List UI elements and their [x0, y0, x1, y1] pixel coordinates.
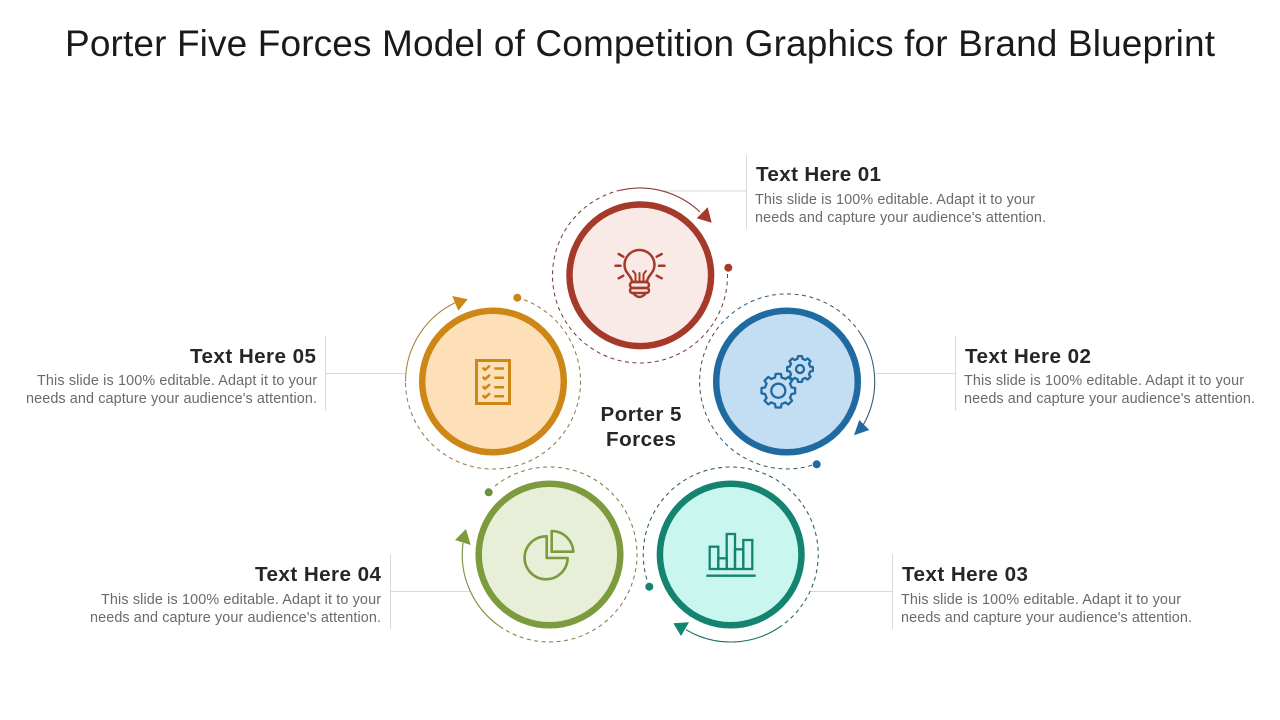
dashed orbit 2: [700, 294, 860, 469]
text block 05: [26, 345, 317, 407]
arrowhead 2: [854, 420, 869, 435]
text block 05: Text Here 05: [190, 345, 316, 368]
dot 1: [724, 264, 732, 272]
force 5: checklist node: [406, 294, 580, 469]
text block 03: [901, 563, 1192, 626]
solid arc 1: [620, 188, 700, 212]
circle 4: [479, 484, 620, 625]
text block 04: This slide is 100% editable. Adapt it to your: [101, 592, 381, 608]
text block 01: Text Here 01: [756, 163, 881, 186]
dot 2: [813, 460, 821, 468]
force 1: lightbulb node: [553, 188, 732, 363]
center label: Porter 5 Forces: [600, 403, 682, 451]
dashed orbit 1: [553, 190, 728, 363]
text block 02: needs and capture your audience's attention.: [964, 391, 1255, 407]
solid arc 2: [860, 333, 875, 427]
icon: checklist: [476, 360, 510, 404]
icon: lightbulb: [616, 250, 664, 297]
dashed orbit 4: [495, 467, 637, 642]
solid arc 4: [462, 543, 500, 627]
solid arc 3: [686, 625, 782, 642]
center label: Porter 5 Forces: Porter 5: [600, 403, 682, 426]
text block 01: [755, 163, 1046, 226]
text block 04: Text Here 04: [255, 563, 382, 586]
connector lines: [325, 155, 956, 629]
circle 5: [422, 311, 564, 452]
text block 02: This slide is 100% editable. Adapt it to your: [964, 373, 1244, 389]
icon: bar chart: [706, 534, 756, 576]
force 3: bar chart node: [643, 467, 818, 642]
arrowhead 1: [697, 207, 712, 223]
force 4: pie chart node: [455, 467, 637, 642]
text block 01: This slide is 100% editable. Adapt it to your: [755, 192, 1035, 208]
icon: gears: [762, 356, 813, 407]
arrowhead 3: [673, 622, 689, 636]
text block 02: [964, 345, 1255, 407]
dashed orbit 3: [643, 467, 818, 625]
text block 04: needs and capture your audience's attention.: [90, 610, 381, 626]
circle 1: [570, 204, 711, 346]
dot 4: [485, 488, 493, 496]
circle 3: [660, 484, 802, 625]
text block 03: This slide is 100% editable. Adapt it to your: [901, 592, 1181, 608]
text block 03: needs and capture your audience's attention.: [901, 610, 1192, 626]
circle 2: [716, 311, 858, 452]
title: Porter Five Forces Model of Competition Graphics for Brand Blueprint: [65, 23, 1216, 64]
text block 05: This slide is 100% editable. Adapt it to your: [37, 373, 317, 389]
dot 3: [645, 583, 653, 591]
center label: Porter 5 Forces: Forces: [606, 428, 676, 451]
text block 01: needs and capture your audience's attention.: [755, 210, 1046, 226]
dashed orbit 5: [406, 300, 580, 469]
arrowhead 5: [452, 296, 468, 311]
text block 05: needs and capture your audience's attention.: [26, 391, 317, 407]
arrowhead 4: [455, 529, 471, 545]
text block 04: [90, 563, 382, 626]
text block 02: Text Here 02: [965, 345, 1091, 368]
icon: pie chart: [525, 531, 573, 579]
solid arc 5: [406, 301, 459, 382]
text block 03: Text Here 03: [902, 563, 1028, 586]
dot 5: [513, 294, 521, 302]
force 2: gears node: [700, 294, 875, 469]
